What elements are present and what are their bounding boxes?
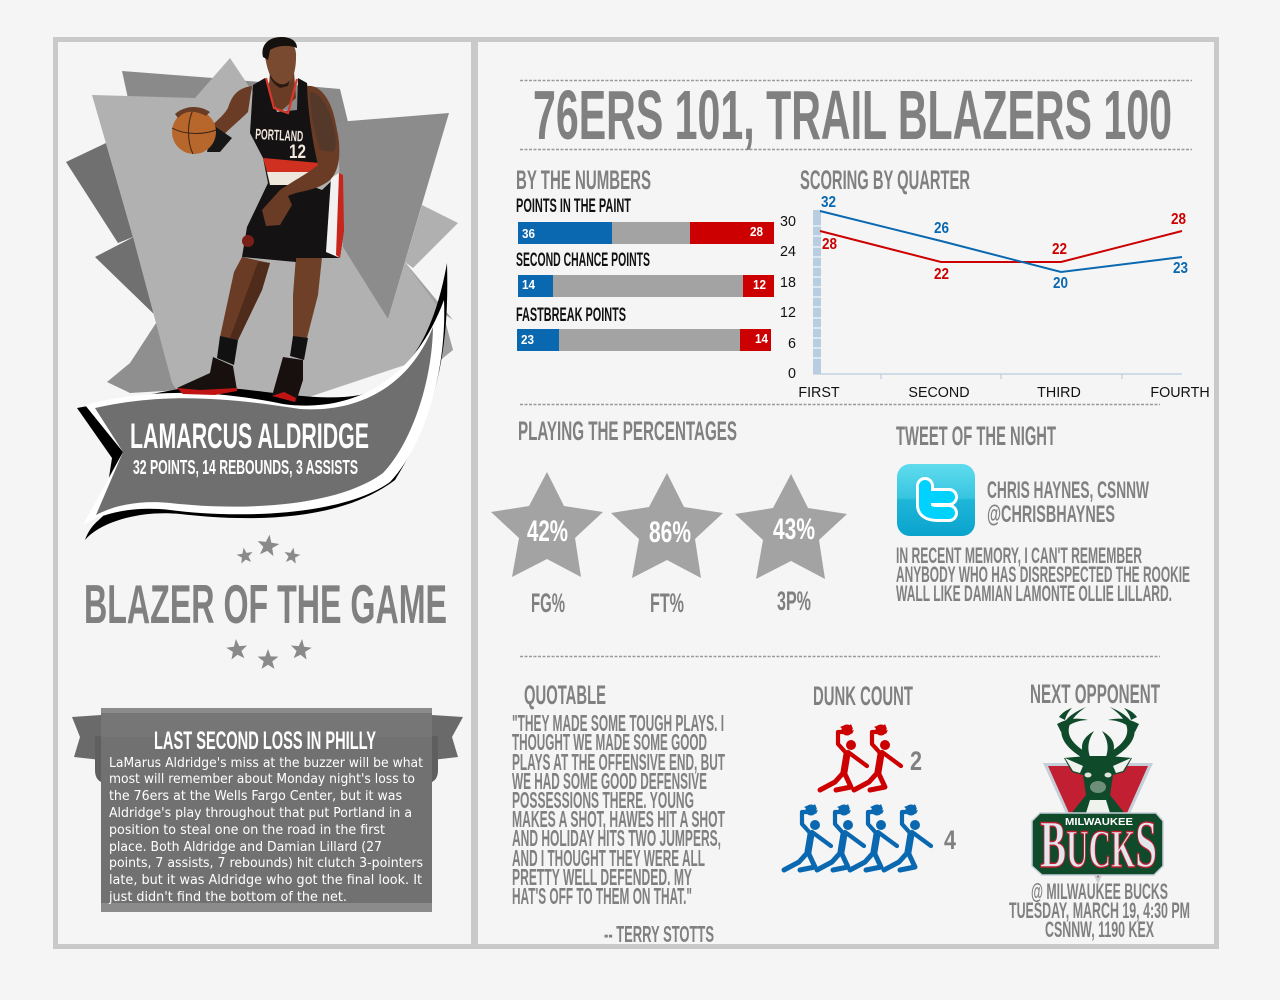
story text: [108, 756, 423, 905]
red dunk icons: [820, 724, 901, 790]
quote attribution: -- TERRY STOTTS: [604, 921, 714, 947]
handle: @CHRISBHAYNES: [987, 501, 1115, 528]
red line: trail blazers: 22: [934, 266, 949, 283]
quote text: THOUGHT WE MADE SOME GOOD: [512, 729, 707, 755]
y axis labels: 12: [780, 305, 796, 321]
game details: @ MILWAUKEE BUCKS: [1031, 879, 1168, 904]
story heading: LAST SECOND LOSS IN PHILLY: [154, 727, 376, 755]
y axis labels: 0: [788, 366, 796, 382]
bar: second chance points: SECOND CHANCE POINTS: [516, 250, 650, 271]
stars below title: [225, 638, 313, 669]
panel: tweet of the night: [896, 421, 1190, 606]
basketball: [172, 107, 216, 154]
story text: points, 7 assists, 7 rebounds) hit clutch 3-pointers: [109, 856, 423, 871]
tweet text: [896, 543, 1190, 606]
stars above title: [236, 533, 301, 564]
player stats: 32 POINTS, 14 REBOUNDS, 3 ASSISTS: [133, 457, 358, 479]
heading: TWEET OF THE NIGHT: [896, 421, 1056, 451]
ribbon story box: [72, 708, 463, 912]
icon: twitter: [897, 464, 975, 536]
panel: blazer of the game: [66, 37, 463, 912]
blue dunk icons: [784, 804, 931, 870]
y axis labels: 18: [780, 275, 796, 291]
heading: NEXT OPPONENT: [1030, 679, 1160, 709]
bar: second chance points: 14: [522, 277, 536, 292]
y axis labels: 30: [780, 214, 796, 230]
quote text: [512, 710, 725, 909]
shorts: [242, 173, 344, 262]
socks: [217, 336, 238, 365]
y axis labels: [780, 214, 796, 382]
quote text: PRETTY WELL DEFENDED. MY: [512, 864, 692, 890]
quote text: "THEY MADE SOME TOUGH PLAYS. I: [512, 710, 724, 736]
legs: [220, 257, 270, 340]
dashed dividers: [520, 80, 1192, 656]
bar: second chance points: [516, 250, 774, 297]
red line: trail blazers: [820, 211, 1186, 283]
deer head: [1064, 756, 1132, 815]
quote text: PLAYS AT THE OFFENSIVE END, BUT: [512, 749, 725, 775]
blue line: 76ers: [820, 194, 1188, 292]
heading: DUNK COUNT: [813, 681, 913, 711]
y axis labels: 6: [788, 336, 796, 352]
panel: by the numbers: [516, 165, 774, 351]
y axis band: [813, 210, 821, 374]
red line: trail blazers: 22: [1052, 241, 1067, 258]
shoes: [177, 357, 237, 394]
x axis labels: SECOND: [908, 385, 970, 401]
bar: fastbreak points: 23: [521, 332, 534, 347]
story text: Aldridge's play throughout that put Portland in a: [109, 806, 412, 821]
quote text: AND I THOUGHT THEY WERE ALL: [512, 845, 705, 871]
stat: free throw percentage: [611, 473, 723, 618]
game details: CSNNW, 1190 KEX: [1045, 917, 1154, 942]
bar: fastbreak points: 14: [755, 331, 769, 346]
stat: three point percentage: [735, 474, 847, 616]
bar: points in the paint: POINTS IN THE PAINT: [516, 196, 631, 217]
story text: most will remember about Monday night's loss to: [109, 772, 415, 787]
quote text: MAKES A SHOT, HAWES HIT A SHOT: [512, 806, 725, 832]
game details: [1009, 879, 1190, 942]
stat: free throw percentage: FT%: [650, 588, 684, 618]
stat: three point percentage: 43%: [773, 513, 815, 546]
panel: quotable: [512, 680, 725, 947]
x axis labels: [798, 385, 1210, 401]
blue line: 76ers: 20: [1053, 275, 1068, 292]
x axis labels: FOURTH: [1150, 385, 1210, 401]
jersey lettering: PORTLAND: [255, 126, 304, 146]
author: CHRIS HAYNES, CSNNW: [987, 477, 1149, 504]
badge: [1032, 813, 1163, 875]
panel: playing the percentages: [491, 416, 847, 618]
x axis labels: FIRST: [798, 385, 840, 401]
heading: BY THE NUMBERS: [516, 165, 651, 195]
bucks wordmark: BUCKS: [1040, 806, 1157, 882]
x axis labels: THIRD: [1037, 385, 1081, 401]
red line: trail blazers: 28: [822, 236, 837, 253]
neck and head: [268, 72, 296, 112]
bar: points in the paint: [516, 196, 774, 244]
jersey: [250, 78, 320, 185]
logo: milwaukee bucks: [1032, 707, 1163, 884]
bar: fastbreak points: [516, 305, 771, 351]
heading: PLAYING THE PERCENTAGES: [518, 416, 737, 446]
stat: field goal percentage: [491, 472, 603, 618]
story text: just didn't find the bottom of the net.: [108, 890, 347, 905]
stat: three point percentage: 3P%: [777, 586, 811, 616]
y axis labels: 24: [780, 244, 796, 260]
banner: [77, 263, 447, 540]
bar: second chance points: 12: [753, 277, 766, 292]
panel title: BLAZER OF THE GAME: [84, 573, 447, 635]
line chart: [780, 194, 1210, 401]
story text: the 76ers at the Wells Fargo Center, but it was: [109, 789, 402, 804]
panel: next opponent: [1009, 679, 1190, 942]
stat: field goal percentage: FG%: [531, 588, 565, 618]
quote text: AND HOLIDAY HITS TWO JUMPERS,: [512, 825, 721, 851]
heading: SCORING BY QUARTER: [800, 165, 970, 195]
red line: trail blazers: 28: [1171, 211, 1186, 228]
stat: free throw percentage: 86%: [649, 516, 691, 549]
quote text: POSSESSIONS THERE. YOUNG: [512, 787, 694, 813]
blue line: 76ers: 23: [1173, 260, 1188, 277]
red dunk count: 2: [910, 746, 922, 776]
bar: points in the paint: 36: [522, 226, 535, 241]
story text: LaMarus Aldridge's miss at the buzzer will be what: [109, 756, 423, 771]
stat: field goal percentage: 42%: [527, 515, 568, 548]
player figure: [172, 37, 344, 402]
blue line: 76ers: 26: [934, 220, 949, 237]
panel: dunk count: [784, 681, 956, 870]
background shards: [66, 58, 458, 400]
front arm: [262, 86, 339, 226]
bar: fastbreak points: FASTBREAK POINTS: [516, 305, 626, 326]
quote text: WE HAD SOME GOOD DEFENSIVE: [512, 768, 707, 794]
antlers: [1057, 707, 1139, 758]
blue dunk count: 4: [944, 825, 956, 855]
back arm: [208, 86, 252, 142]
milwaukee wordmark: MILWAUKEE: [1065, 816, 1133, 828]
jersey number: 12: [289, 142, 306, 163]
quote text: HAT'S OFF TO THEM ON THAT.": [512, 883, 692, 909]
x axis: [813, 374, 1182, 379]
story text: late, but it was Aldridge who got the final look. It: [109, 873, 422, 888]
story text: position to steal one on the road in the first: [109, 823, 385, 838]
panel: scoring by quarter: [780, 165, 1210, 401]
story text: place. Both Aldridge and Damian Lillard (27: [109, 840, 382, 855]
bar: points in the paint: 28: [750, 224, 763, 239]
heading: QUOTABLE: [524, 680, 606, 710]
player name: LAMARCUS ALDRIDGE: [130, 417, 369, 456]
blue line: 76ers: 32: [821, 194, 836, 211]
